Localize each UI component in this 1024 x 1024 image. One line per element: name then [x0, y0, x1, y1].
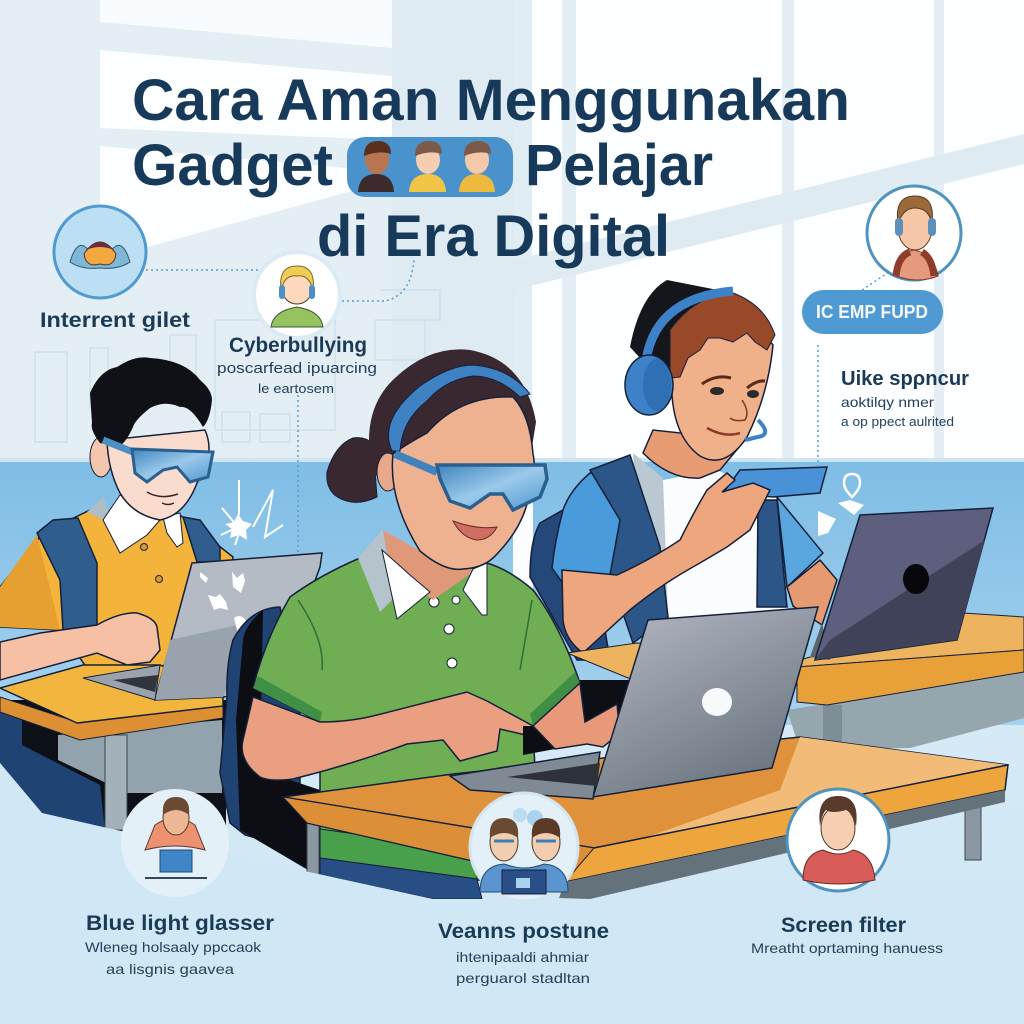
title: Pelajar	[525, 133, 713, 198]
laptop: right	[810, 508, 993, 660]
text: right note: Uike spρncur	[841, 368, 969, 390]
text: cyberbullying: Cyberbullying	[229, 334, 367, 357]
text: cyberbullying: le eartosem	[258, 381, 334, 396]
backpack back	[530, 510, 610, 660]
blue goggles	[103, 440, 213, 482]
straps	[590, 455, 668, 643]
text: screen filter: Screen filter	[781, 914, 906, 937]
hair and bun	[327, 438, 377, 502]
icon: cyberbullying student	[254, 252, 340, 338]
text: cyberbullying: poscarfead ipuarcing	[217, 360, 377, 377]
icon: internet gilet	[54, 206, 146, 298]
text: screen filter	[751, 914, 943, 956]
title badge: three students	[347, 137, 513, 197]
hair back	[630, 280, 733, 380]
straps	[37, 518, 97, 630]
title	[132, 68, 850, 269]
laptop: center	[450, 607, 818, 799]
text: right note: a op ppect aulrited	[841, 414, 954, 429]
headphones	[645, 291, 733, 370]
text: screen filter: Mreatht oprtaming hanuess	[751, 940, 943, 956]
text: posture: perguarol stadltan	[456, 970, 590, 986]
text: blue light: Wleneg holsaaly ppccaok	[85, 939, 262, 955]
student: right boy	[530, 280, 864, 660]
shirt	[0, 510, 233, 668]
laptop: left	[83, 553, 322, 700]
icon: blue light glasses	[121, 789, 229, 897]
face	[377, 453, 399, 491]
icon: student with headphones	[867, 186, 961, 280]
right arm and hand with phone	[562, 467, 827, 653]
text: posture	[438, 920, 609, 986]
text: blue light	[85, 912, 274, 977]
text: blue light: aa lisgnis gaavea	[106, 961, 234, 977]
pill label: IC EMP FUPD	[816, 302, 928, 322]
text: right note	[841, 368, 969, 429]
text: right note: aoktilqy nmer	[841, 394, 934, 410]
title: Cara Aman Menggunakan	[132, 68, 850, 133]
floor foreground	[0, 763, 600, 1024]
desk: center	[283, 737, 1008, 899]
icon: screen filter student	[787, 789, 889, 891]
shirt	[253, 558, 580, 880]
neck	[643, 430, 745, 478]
face	[672, 308, 773, 460]
student: left boy	[0, 357, 233, 680]
small icons	[844, 474, 860, 497]
arms	[242, 692, 535, 780]
blue goggles	[395, 454, 547, 510]
arm	[0, 613, 160, 680]
face	[90, 437, 112, 477]
text: posture: Veanns postune	[438, 920, 609, 943]
collar	[87, 497, 120, 540]
pill label	[802, 290, 943, 334]
title: di Era Digital	[317, 204, 670, 269]
neck	[383, 530, 497, 600]
headband	[388, 365, 530, 451]
text: posture: ihtenipaaldi ahmiar	[456, 949, 589, 965]
sparkle	[221, 480, 283, 545]
student: center girl	[220, 349, 620, 880]
text: cyberbullying	[217, 334, 377, 396]
icon: posture students	[470, 793, 578, 901]
title: Gadget	[132, 133, 333, 198]
label: internet gilet: Interrent gilet	[40, 309, 190, 332]
connector lines	[146, 258, 892, 555]
desk: left	[0, 665, 226, 850]
white shirt	[630, 455, 787, 620]
text: blue light: Blue light glasser	[86, 912, 274, 935]
chair	[220, 607, 300, 850]
collar	[358, 529, 392, 612]
desk: right	[567, 613, 1024, 750]
